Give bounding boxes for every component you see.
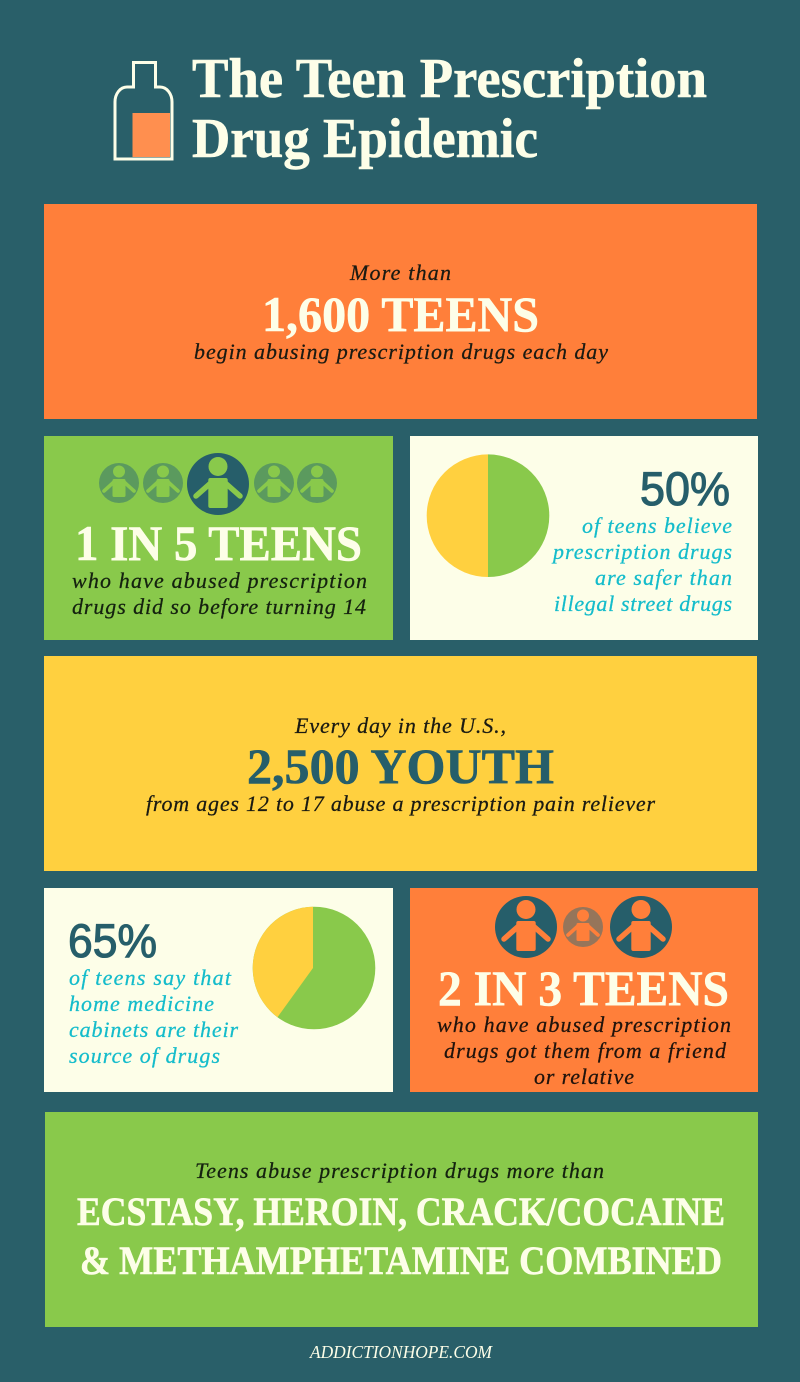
panel: 50 percent: prescription drugs: [551, 539, 732, 564]
icon: three people, two highlighted: [495, 896, 672, 958]
title: The Teen Prescription: [192, 48, 707, 110]
panel: more than other drugs combined: ECSTASY, HEROIN, CRACK/COCAINE: [77, 1189, 725, 1234]
panel: 2 in 3 teens: drugs got them from a friend: [444, 1038, 727, 1063]
panel: 1 in 5 teens: [44, 436, 393, 640]
panel: more than other drugs combined: [45, 1112, 758, 1327]
footer source: ADDICTIONHOPE.COM: [309, 1342, 493, 1362]
panel: 2 in 3 teens: or relative: [534, 1064, 634, 1089]
panel: 2,500 youth: 2,500 YOUTH: [247, 738, 554, 794]
panel: 65 percent: 65%: [68, 914, 157, 967]
panel: 65 percent: cabinets are their: [69, 1017, 238, 1042]
panel: 1 in 5 teens: 1 IN 5 TEENS: [75, 515, 362, 571]
panel: 65 percent: source of drugs: [69, 1043, 220, 1068]
panel: 1 in 5 teens: drugs did so before turning 14: [72, 594, 366, 619]
pie chart: 65 percent: [253, 907, 375, 1029]
panel: 2 in 3 teens: 2 IN 3 TEENS: [438, 960, 729, 1016]
panel: 2,500 youth: Every day in the U.S.,: [294, 713, 506, 738]
panel: 50 percent: 50%: [640, 462, 730, 515]
panel: 1,600 teens: 1,600 TEENS: [262, 286, 539, 342]
panel: 50 percent: are safer than: [595, 565, 732, 590]
panel: 2 in 3 teens: who have abused prescription: [437, 1012, 731, 1037]
panel: 2,500 youth: from ages 12 to 17 abuse a prescription pain reliever: [146, 791, 655, 816]
title: [192, 48, 707, 170]
panel: more than other drugs combined: Teens abuse prescription drugs more than: [195, 1158, 604, 1183]
panel: 65 percent: home medicine: [69, 991, 214, 1016]
panel: 65 percent: of teens say that: [69, 965, 232, 990]
panel: 2,500 youth: [44, 656, 757, 871]
panel: more than other drugs combined: & METHAMPHETAMINE COMBINED: [80, 1238, 722, 1283]
panel: 1,600 teens: [44, 204, 757, 419]
panel: 1,600 teens: begin abusing prescription drugs each day: [194, 339, 608, 364]
panel: 65 percent: [44, 888, 393, 1092]
panel: 50 percent: illegal street drugs: [554, 591, 732, 616]
icon: five people, one highlighted: [99, 453, 337, 515]
panel: 1 in 5 teens: who have abused prescription: [72, 568, 367, 593]
icon: medicine bottle: [115, 62, 172, 159]
panel: 1,600 teens: More than: [349, 260, 451, 285]
panel: 50 percent: [410, 436, 758, 640]
panel: 50 percent: of teens believe: [582, 513, 732, 538]
pie chart: 50 percent: [427, 454, 549, 577]
panel: 2 in 3 teens: [410, 888, 758, 1092]
title: Drug Epidemic: [192, 108, 538, 170]
